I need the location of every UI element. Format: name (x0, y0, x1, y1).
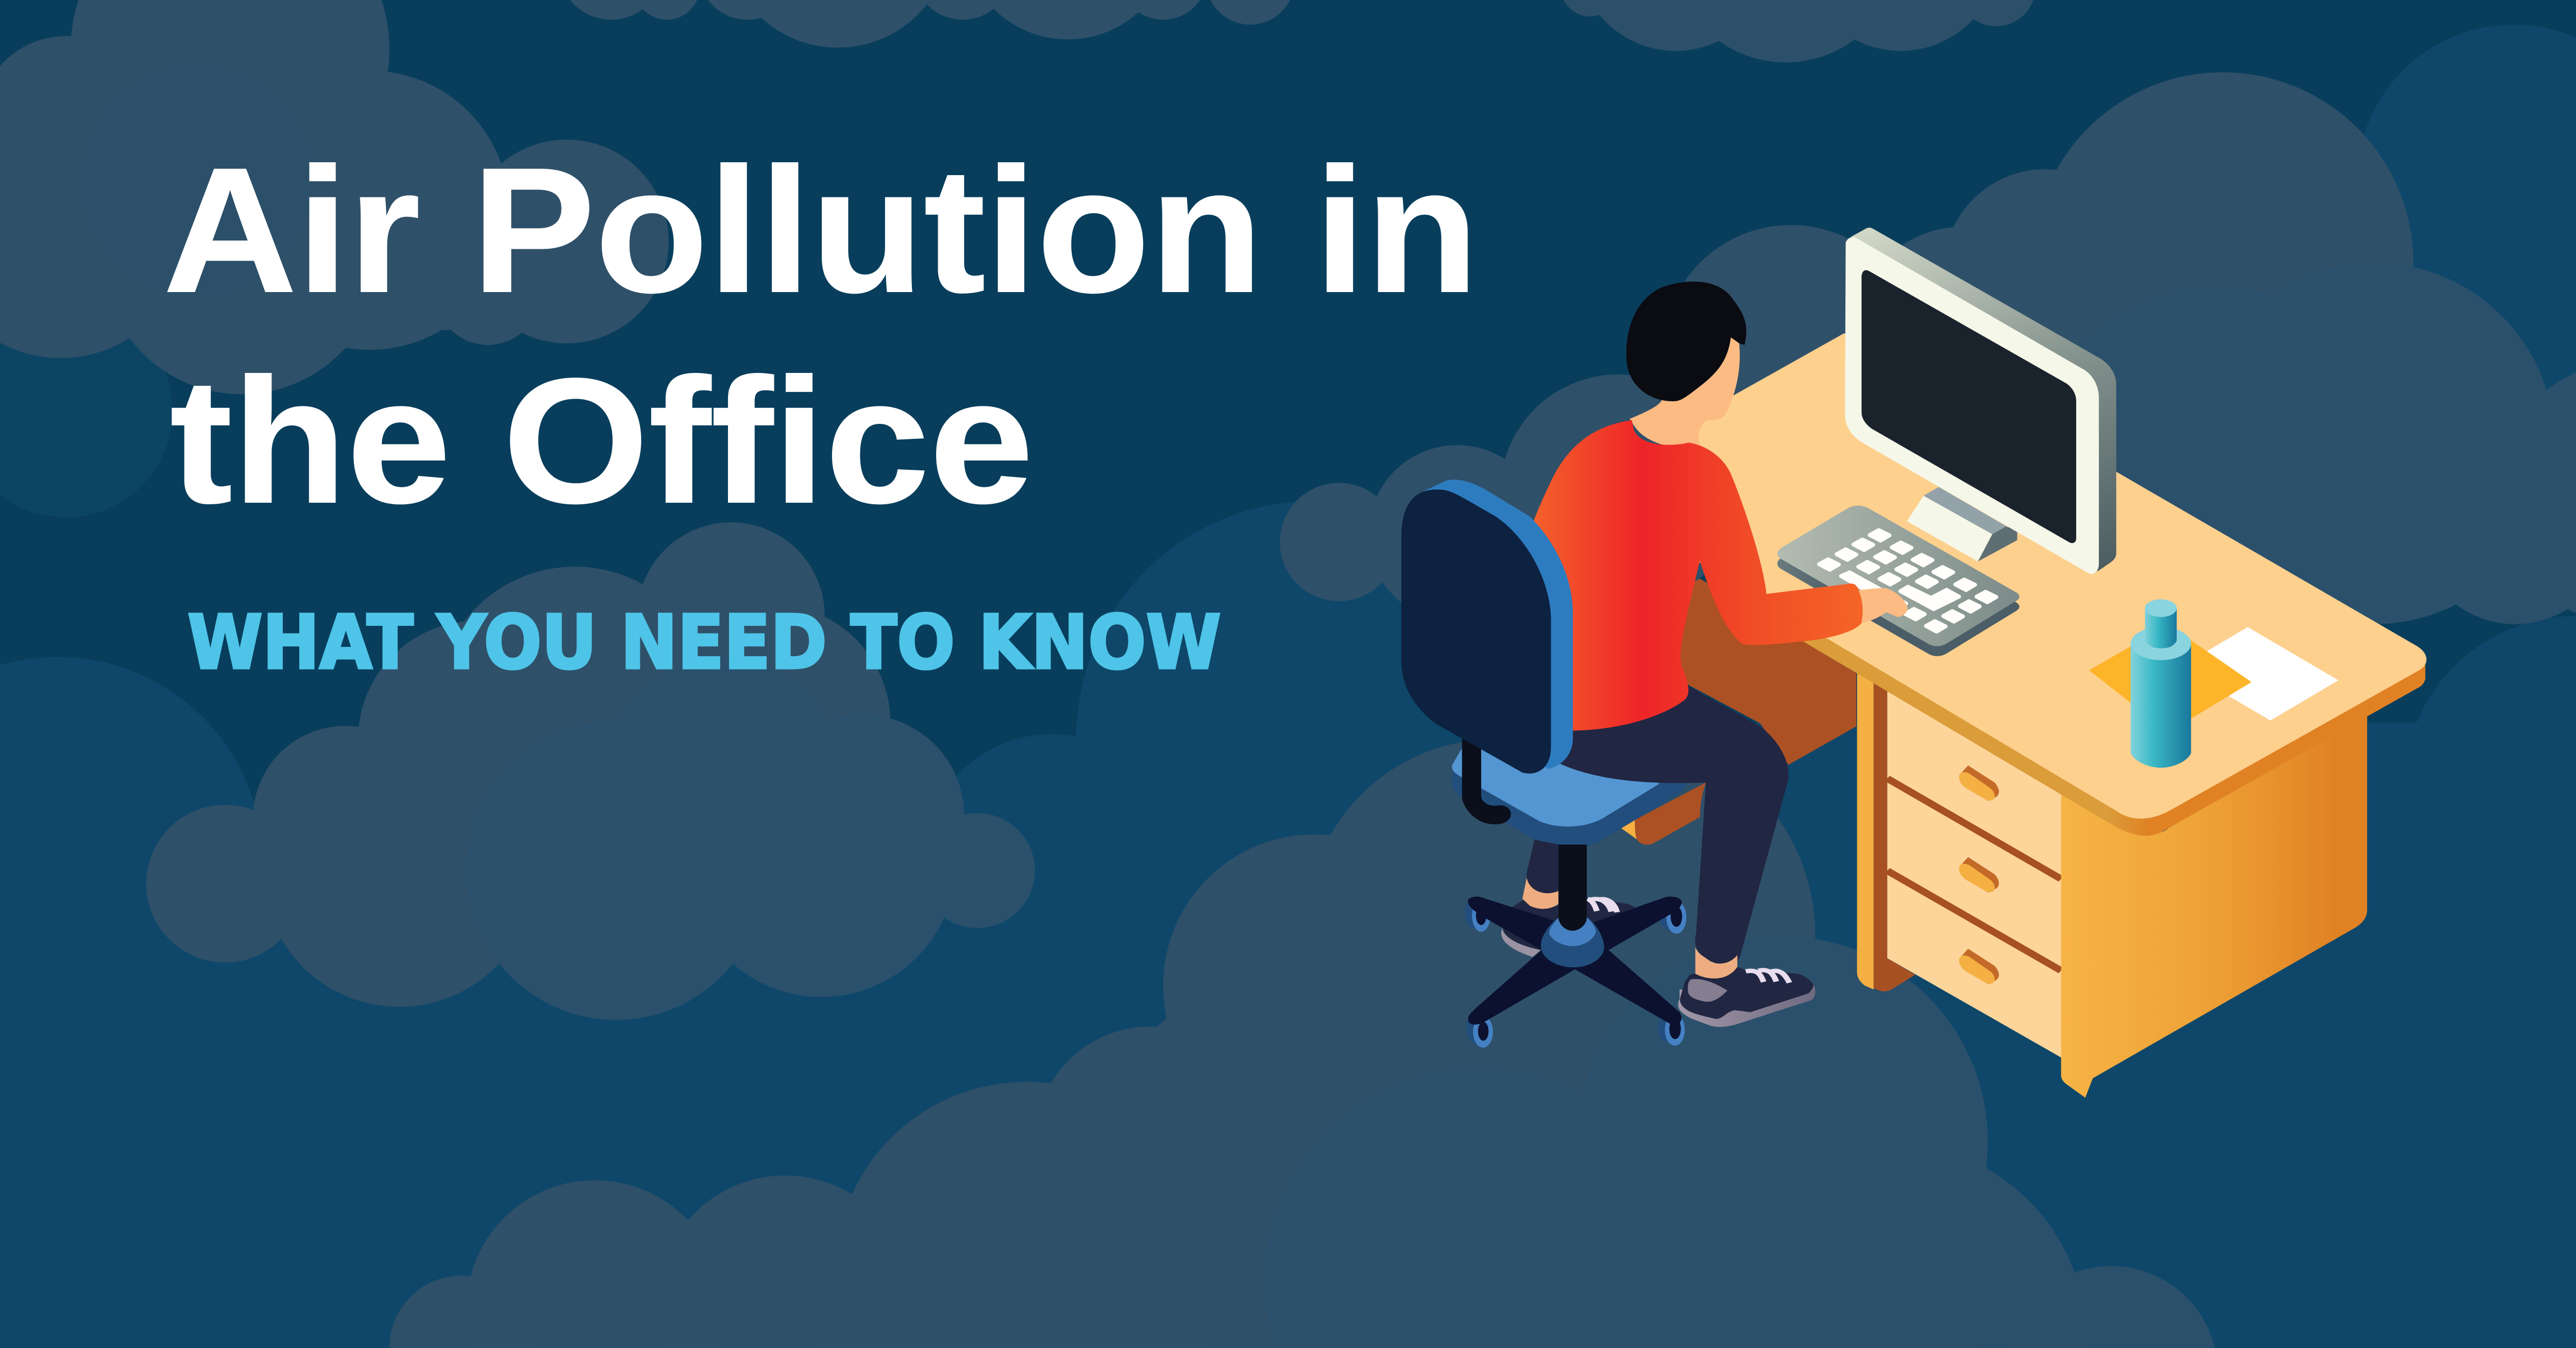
sweater (1531, 420, 1862, 731)
orange paper (2089, 625, 2251, 732)
keyboard base (1777, 516, 2020, 656)
person (1531, 282, 1908, 964)
neck and face (1630, 337, 1740, 448)
white paper (2180, 627, 2338, 721)
monitor screen (1861, 270, 2076, 543)
keyboard keys (1819, 530, 1996, 632)
monitor (1845, 228, 2116, 574)
hair (1626, 282, 1747, 401)
chair seat (1452, 749, 1688, 847)
keyboard (1777, 506, 2020, 656)
under desk brown panel (1680, 578, 1856, 765)
bottle (2130, 599, 2191, 768)
monitor back (1851, 228, 2116, 571)
drawer dividers (1887, 778, 2061, 970)
cloud: middle left (146, 522, 1035, 1020)
hub (1541, 917, 1604, 967)
desk right side panel (2061, 714, 2367, 1098)
cloud: top right small (1561, 0, 2036, 62)
far shoe laces (1588, 899, 1617, 912)
drawer column inner (1874, 679, 1915, 992)
desktop front left edge (1711, 555, 2146, 836)
title line 1: Air Pollution in (163, 131, 1479, 330)
hub cap (1549, 917, 1596, 946)
drawer handles (1959, 765, 1999, 984)
subtitle: WHAT YOU NEED TO KNOW (188, 599, 1221, 686)
cloud: top left (0, 0, 669, 394)
star base (1468, 897, 1682, 1025)
monitor stand (1907, 487, 2017, 561)
near ankle and shoe (1678, 947, 1815, 1027)
drawer fronts (1887, 679, 2066, 1061)
cloud: top centre (558, 0, 1295, 47)
drawer column side (1857, 670, 1874, 989)
title line 2: the Office (170, 342, 1033, 540)
left leg and far shoe (1501, 840, 1635, 957)
desktop right edge (2146, 658, 2426, 836)
desk (1680, 333, 2427, 1098)
far shoe (1503, 900, 1635, 950)
near shoe (1680, 967, 1814, 1019)
hips and near leg (1545, 686, 1789, 964)
chair back and arm (1401, 480, 1573, 824)
seat underside (1452, 761, 1688, 847)
title (163, 131, 1479, 540)
far shoe sole (1501, 928, 1541, 957)
desktop surface (1688, 333, 2427, 818)
shoe laces (1746, 970, 1789, 983)
cloud: behind desk upper right (1280, 72, 2576, 706)
keyboard top (1777, 506, 2020, 646)
lower desk corner under seat (1621, 782, 1706, 845)
far ankle (1522, 878, 1558, 909)
near ankle (1696, 947, 1737, 979)
hand (1858, 588, 1908, 623)
monitor frame (1845, 237, 2099, 574)
chair base (1465, 845, 1686, 1048)
chair back (1401, 480, 1573, 774)
illustration: office desk scene (1401, 228, 2427, 1098)
casters (1465, 897, 1686, 1048)
post (1558, 845, 1587, 931)
far leg (1527, 840, 1564, 893)
shoe heel patch (1688, 979, 1727, 1002)
chair arm (1462, 737, 1511, 824)
seat cushion (1452, 749, 1660, 827)
paper and bottle on desk (2089, 599, 2338, 768)
cloud: bottom centre (389, 731, 2215, 1348)
shoe sole (1678, 984, 1815, 1027)
